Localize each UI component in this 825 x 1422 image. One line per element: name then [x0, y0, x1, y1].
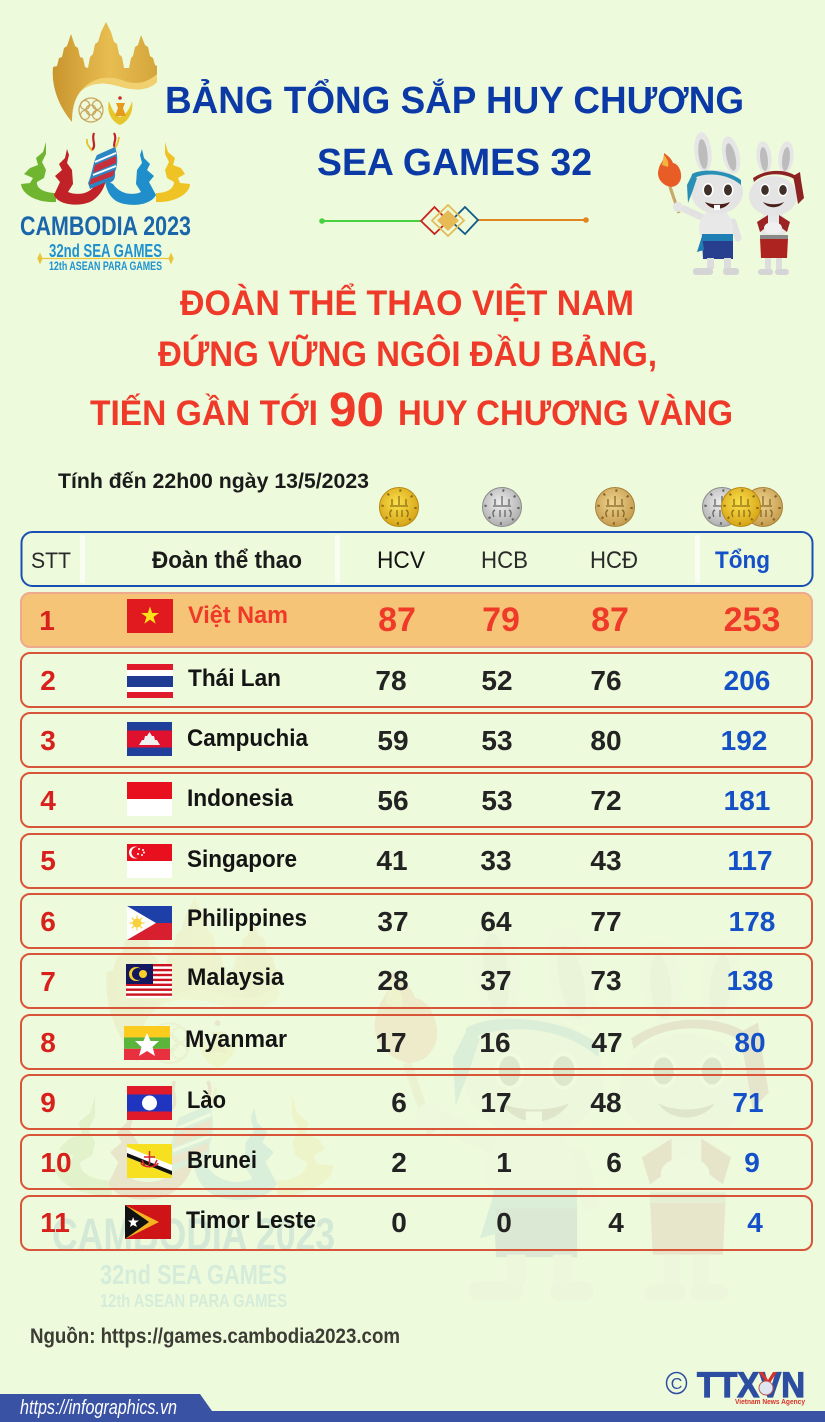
row 1: Việt Nam: [21, 593, 812, 647]
row 2: Thái Lan: [21, 653, 812, 707]
red headline: ĐỨNG VỮNG NGÔI ĐẦU BẢNG,: [158, 334, 657, 374]
row 11: Timor Leste: 0: [496, 1207, 512, 1238]
red headline: [90, 283, 733, 437]
table header: STT: [31, 548, 71, 573]
footer bar: [0, 1394, 825, 1422]
table header: HCB: [481, 547, 528, 574]
watermark: mascots: [375, 912, 769, 1300]
watermark text: [52, 1209, 335, 1311]
medals row: [380, 488, 782, 526]
row 3: Campuchia: 192: [721, 725, 767, 756]
row 11: Timor Leste: [21, 1196, 812, 1250]
flag: Singapore: [127, 844, 172, 878]
row 2: Thái Lan: Thái Lan: [188, 665, 281, 692]
mascot: boy rabbit with torch: [658, 131, 743, 275]
row 10: Brunei: 10: [40, 1147, 72, 1178]
flag: Cambodia: [127, 722, 172, 756]
row 6: Philippines: 6: [40, 906, 56, 937]
row 8: Myanmar: 17: [375, 1027, 407, 1058]
row 3: Campuchia: 3: [40, 725, 56, 756]
row 9: Lào: 9: [40, 1087, 56, 1118]
watermark art: [54, 897, 333, 1200]
row 7: Malaysia: 37: [480, 965, 512, 996]
icon: copyright: C: [671, 1376, 682, 1393]
row 9: Lào: 48: [590, 1087, 622, 1118]
table header: HCĐ: [590, 547, 638, 574]
row 6: Philippines: 64: [480, 906, 512, 937]
title: SEA GAMES 32: [317, 142, 592, 184]
flag: Vietnam: [127, 599, 173, 633]
flag: Malaysia: [126, 964, 172, 998]
row 1: Việt Nam: 253: [724, 601, 780, 639]
row 10: Brunei: [21, 1135, 812, 1189]
table header: HCV: [377, 547, 425, 574]
agency tagline: Vietnam News Agency: [735, 1397, 806, 1406]
row 1: Việt Nam: 87: [591, 601, 629, 639]
icon: silver medal: [482, 488, 522, 526]
table header: Tổng: [715, 547, 770, 574]
title: BẢNG TỔNG SẮP HUY CHƯƠNG: [165, 77, 744, 122]
row 9: Lào: [21, 1075, 812, 1129]
date note: Tính đến 22h00 ngày 13/5/2023: [58, 470, 369, 493]
logo text: 32nd SEA Games: 32nd SEA GAMES: [49, 240, 162, 261]
icon: red V accent and globe: [759, 1372, 777, 1395]
row 10: Brunei: 6: [606, 1147, 622, 1178]
row 11: Timor Leste: 0: [391, 1207, 407, 1238]
mascots: [658, 131, 804, 275]
agency wordmark: TTXVN: [697, 1366, 805, 1405]
row 9: Lào: 71: [732, 1087, 764, 1118]
row 1: Việt Nam: 1: [39, 605, 55, 636]
row 10: Brunei: 1: [496, 1147, 512, 1178]
row 11: Timor Leste: 4: [747, 1207, 763, 1238]
icon: bronze medal: [596, 488, 634, 526]
row 7: Malaysia: Malaysia: [187, 964, 285, 991]
flag: Laos: [127, 1086, 172, 1120]
row 6: Philippines: 77: [590, 906, 622, 937]
flag: Myanmar: [124, 1026, 170, 1060]
row 11: Timor Leste: 11: [40, 1207, 70, 1238]
row 7: Malaysia: 138: [727, 965, 773, 996]
icon: naga serpents: [21, 133, 190, 205]
table header: Đoàn thể thao: [152, 547, 302, 574]
TTXVN logo: [666, 1366, 806, 1406]
row 2: Thái Lan: 76: [590, 665, 622, 696]
table header: [22, 532, 812, 586]
row 3: Campuchia: 80: [590, 725, 622, 756]
logo divider: [38, 254, 173, 263]
icon: golden crown: [53, 22, 157, 125]
row 1: Việt Nam: 79: [482, 601, 520, 639]
row 4: Indonesia: Indonesia: [187, 785, 294, 812]
row 5: Singapore: 41: [376, 845, 408, 876]
row 8: Myanmar: 16: [479, 1027, 511, 1058]
row 5: Singapore: 117: [727, 845, 773, 876]
red headline: TIẾN GẦN TỚI: [90, 393, 318, 433]
mascot: girl rabbit: [749, 140, 804, 275]
logo: Cambodia 2023 SEA Games: [20, 22, 191, 273]
flag: Thailand: [127, 664, 173, 698]
flag: Indonesia: [127, 782, 172, 816]
row 7: Malaysia: 28: [377, 965, 409, 996]
row 4: Indonesia: 4: [40, 785, 56, 816]
row 1: Việt Nam: 87: [378, 601, 416, 639]
row 5: Singapore: 5: [40, 845, 56, 876]
watermark text: CAMBODIA 2023: [52, 1209, 335, 1260]
row 5: Singapore: Singapore: [187, 846, 297, 873]
icon: gold medal: [380, 488, 418, 526]
icon: all medals: [702, 488, 782, 526]
row 10: Brunei: Brunei: [187, 1147, 257, 1174]
row 2: Thái Lan: 52: [481, 665, 513, 696]
row 2: Thái Lan: 2: [40, 665, 56, 696]
row 4: Indonesia: 56: [377, 785, 409, 816]
row 1: Việt Nam: Việt Nam: [188, 602, 288, 629]
row 11: Timor Leste: Timor Leste: [186, 1207, 316, 1234]
row 4: Indonesia: [21, 773, 812, 827]
row 3: Campuchia: 59: [377, 725, 409, 756]
row 6: Philippines: 37: [377, 906, 409, 937]
row 3: Campuchia: [21, 713, 812, 767]
row 5: Singapore: 33: [480, 845, 512, 876]
row 6: Philippines: [21, 894, 812, 948]
logo text: 12th ASEAN Para Games: 12th ASEAN PARA GAMES: [49, 259, 162, 273]
logo text: Cambodia 2023: CAMBODIA 2023: [20, 211, 191, 241]
row 3: Campuchia: 53: [481, 725, 513, 756]
red headline: 90: [329, 384, 384, 437]
row 3: Campuchia: Campuchia: [187, 725, 309, 752]
row 10: Brunei: 2: [391, 1147, 407, 1178]
row 10: Brunei: 9: [744, 1147, 760, 1178]
row 6: Philippines: 178: [729, 906, 775, 937]
row 9: Lào: 6: [391, 1087, 407, 1118]
row 8: Myanmar: 8: [40, 1027, 56, 1058]
row 7: Malaysia: 73: [590, 965, 622, 996]
red headline: ĐOÀN THỂ THAO VIỆT NAM: [180, 283, 634, 323]
title: [165, 77, 744, 184]
watermark text: 32nd SEA GAMES: [100, 1259, 287, 1290]
source note: Nguồn: https://games.cambodia2023.com: [30, 1325, 400, 1348]
footer bar: https://infographics.vn: [20, 1397, 177, 1419]
flag: Philippines: [127, 906, 172, 940]
row 8: Myanmar: 47: [591, 1027, 623, 1058]
watermark text: 12th ASEAN PARA GAMES: [100, 1291, 287, 1311]
row 2: Thái Lan: 78: [375, 665, 407, 696]
row 7: Malaysia: 7: [40, 966, 56, 997]
row 8: Myanmar: 80: [734, 1027, 766, 1058]
red headline: HUY CHƯƠNG VÀNG: [398, 393, 733, 433]
row 8: Myanmar: Myanmar: [185, 1026, 287, 1053]
row 4: Indonesia: 72: [590, 785, 622, 816]
row 5: Singapore: 43: [590, 845, 622, 876]
row 9: Lào: Lào: [187, 1087, 226, 1114]
ornament divider: [319, 205, 589, 236]
row 4: Indonesia: 53: [481, 785, 513, 816]
row 2: Thái Lan: 206: [724, 665, 770, 696]
row 6: Philippines: Philippines: [187, 905, 307, 932]
row 7: Malaysia: [21, 954, 812, 1008]
flag: Timor Leste: [125, 1205, 171, 1239]
row 11: Timor Leste: 4: [608, 1207, 624, 1238]
row 9: Lào: 17: [480, 1087, 512, 1118]
row 8: Myanmar: [21, 1015, 812, 1069]
row 4: Indonesia: 181: [724, 785, 770, 816]
watermark: SEA Games logo: [52, 897, 335, 1311]
flag: Brunei: [127, 1144, 172, 1178]
row 5: Singapore: [21, 834, 812, 888]
